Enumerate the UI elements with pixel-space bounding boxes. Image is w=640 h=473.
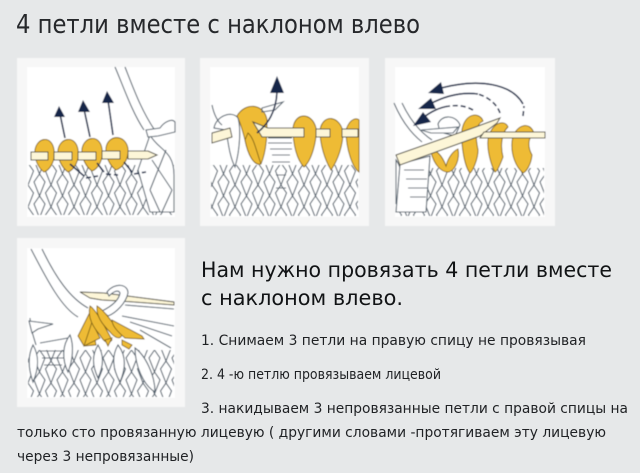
- right edge stitches: [138, 135, 174, 212]
- panel: step 2, knit stitch: [200, 58, 369, 226]
- icon: left needle: [31, 151, 157, 160]
- right rows: [122, 305, 174, 348]
- panel: step 3, pass stitches over: [385, 58, 555, 226]
- yellow stitches: [78, 306, 144, 349]
- yellow loops: [237, 106, 359, 172]
- yellow loops: [431, 115, 534, 173]
- instruction text: 3. накидываем 3 непровязанные петли с правой спицы на: [201, 401, 628, 417]
- icon: right needle: [115, 67, 156, 132]
- icon: left needle: [480, 132, 545, 138]
- left needle and rows: [30, 318, 70, 365]
- heading: [201, 258, 612, 311]
- title: 4 петли вместе с наклоном влево: [16, 10, 420, 40]
- big white stitches: [64, 335, 72, 372]
- heading: Нам нужно провязать 4 петли вместе: [201, 258, 612, 283]
- instruction text: [17, 333, 628, 465]
- icon: stitch on right needle: [421, 117, 460, 136]
- icon: right needle: [31, 249, 88, 317]
- yellow loops: [35, 138, 128, 172]
- icon: left needle: [253, 122, 358, 137]
- instruction text: 2. 4 -ю петлю провязываем лицевой: [201, 367, 441, 383]
- stitches at left: [396, 160, 401, 204]
- panel: step 1, slip stitches: [17, 58, 185, 226]
- icon: left needle with loop: [80, 292, 174, 305]
- needle rungs: [268, 138, 292, 188]
- icon: right needle: [212, 128, 232, 143]
- instruction text: 1. Снимаем 3 петли на правую спицу не провязывая: [201, 333, 586, 349]
- panel: step 4, finished decrease: [17, 238, 185, 407]
- arrows over: [413, 82, 524, 126]
- icon: white loop on needle: [214, 114, 240, 167]
- instruction text: через 3 непровязанные): [17, 449, 194, 465]
- arrows up: [54, 91, 114, 138]
- icon: right needle: [396, 118, 500, 165]
- instruction text: только сто провязанную лицевую ( другими словами -протягиваем эту лицевую: [17, 425, 606, 441]
- heading: с наклоном влево.: [201, 286, 403, 311]
- arrow: [257, 76, 284, 133]
